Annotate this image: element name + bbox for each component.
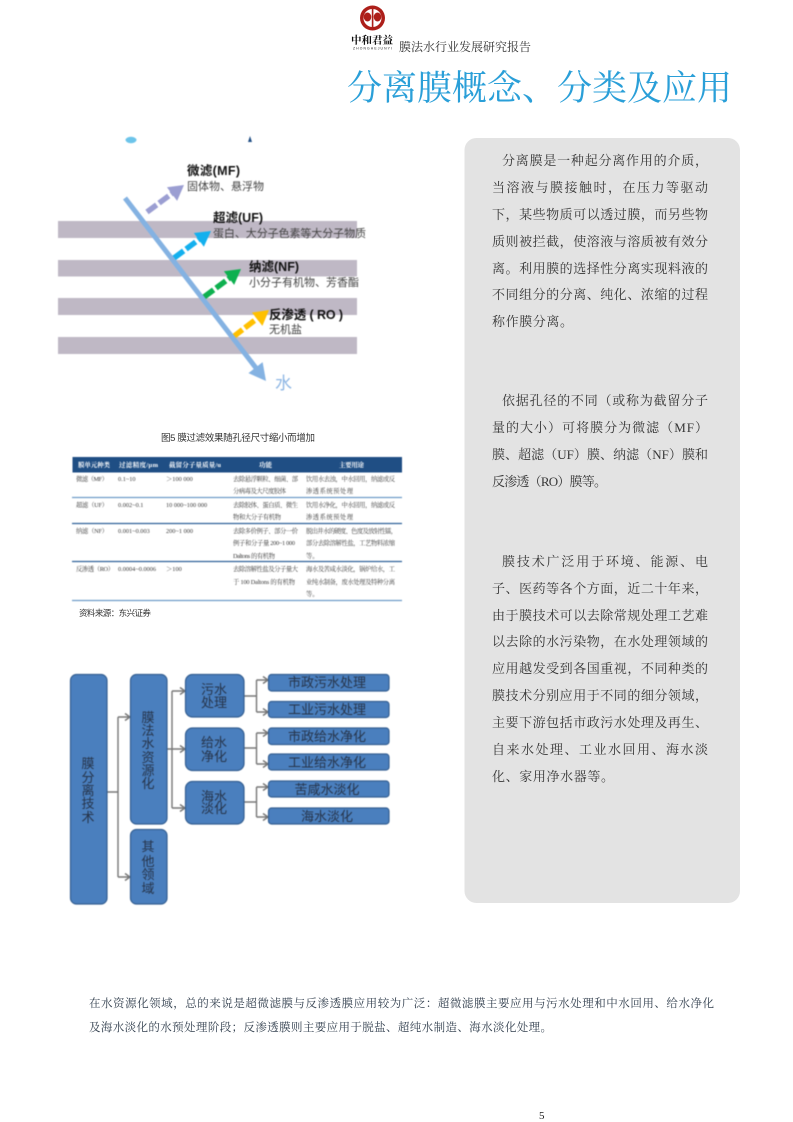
paragraph: definition: 下，某些物质可以透过膜，而另些物 xyxy=(492,207,708,223)
row: NF: 等。 xyxy=(306,551,319,560)
label: RO: 无机盐 xyxy=(269,322,302,336)
label: NF xyxy=(249,259,359,289)
header logo xyxy=(351,6,394,50)
node: 膜法水资源化: 源 xyxy=(141,763,155,778)
node: 膜分离技术: 离 xyxy=(81,783,95,798)
row: UF: 物和大分子有机物 xyxy=(233,512,282,521)
paragraph: applications: 主要下游包括市政污水处理及再生、 xyxy=(492,715,708,730)
panel: membrane description xyxy=(464,138,740,903)
node: 其他领域: 其 xyxy=(141,839,155,854)
row: NF: Daltons 的有机物 xyxy=(233,551,276,560)
label: MF: 微滤(MF) xyxy=(187,163,240,178)
label: UF: 超滤(UF) xyxy=(213,210,263,225)
flow chart: membrane separation technology xyxy=(70,674,389,904)
paragraph: classification xyxy=(492,393,708,489)
row: UF: 10 000~100 000 xyxy=(166,502,207,509)
row: NF: 脱出井水的硬度、色度及放射性镭， xyxy=(306,526,397,535)
node: 其他领域: 领 xyxy=(141,867,155,882)
node: 工业给水净化: 工业给水净化 xyxy=(288,755,366,770)
row: MF: 去除悬浮颗粒、细菌、部 xyxy=(233,474,299,483)
table header: 过滤精度/μm xyxy=(119,460,159,469)
node: 工业污水处理: 工业污水处理 xyxy=(288,702,366,717)
node: 污水处理: 污水 xyxy=(201,682,227,697)
header logo: 中和君益 xyxy=(351,34,394,46)
arrow: NF xyxy=(204,262,246,297)
paragraph: applications: 膜技术广泛用于环境、能源、电 xyxy=(502,554,708,569)
node: 膜分离技术: 分 xyxy=(81,770,95,785)
paragraph: definition xyxy=(492,153,708,329)
label: NF: 纳滤(NF) xyxy=(249,259,299,274)
label: RO xyxy=(269,307,343,336)
table header: 主要用途 xyxy=(339,460,364,469)
row: UF: 去除胶体、蛋白质、微生 xyxy=(233,500,299,509)
row: UF: 饮用水净化，中水回用，纳滤或反 xyxy=(306,500,396,509)
row: RO: 等。 xyxy=(306,589,319,598)
paragraph: applications: 由于膜技术可以去除常规处理工艺难 xyxy=(492,608,708,623)
paragraph: definition: 不同组分的分离、纯化、浓缩的过程 xyxy=(492,287,708,302)
node: 海水淡化 (leaf) xyxy=(268,808,389,824)
paragraph: definition: 质则被拦截，使溶液与溶质被有效分 xyxy=(492,234,708,250)
row: UF: 0.002~0.1 xyxy=(118,502,143,509)
bottom text block xyxy=(89,996,714,1034)
bottom text block: 在水资源化领域，总的来说是超微滤膜与反渗透膜应用较为广泛：超微滤膜主要应用与污水处理和中水回用、给水净化 xyxy=(89,996,714,1010)
node: 给水净化 xyxy=(186,728,244,770)
node: 工业污水处理 xyxy=(268,702,389,718)
row: RO: 0.0004~0.0006 xyxy=(118,566,156,573)
table source: 资料来源：东兴证券 xyxy=(79,608,151,618)
node: 膜分离技术 xyxy=(70,674,107,904)
row: UF: 超滤（UF） xyxy=(76,500,108,509)
node: 膜法水资源化: 化 xyxy=(141,776,155,791)
node: 市政污水处理: 市政污水处理 xyxy=(288,675,366,690)
bottom text block: 及海水淡化的水预处理阶段；反渗透膜则主要应用于脱盐、超纯水制造、海水淡化处理。 xyxy=(89,1020,552,1034)
node: 苦咸水淡化 xyxy=(268,781,389,797)
paragraph: applications: 自来水处理、工业水回用、海水淡 xyxy=(492,742,708,757)
node: 其他领域: 他 xyxy=(141,854,155,869)
row: MF: 微滤（MF） xyxy=(76,474,108,483)
label: MF xyxy=(187,163,264,193)
paragraph: classification: 反渗透（RO）膜等。 xyxy=(492,474,607,489)
connectors xyxy=(107,676,268,880)
table caption: 图5 膜过滤效果随孔径尺寸缩小而增加 xyxy=(161,432,315,444)
table: membrane types xyxy=(72,457,402,600)
row: NF: 200~1 000 xyxy=(166,528,193,535)
row: NF: 例子和分子量 200~1 000 xyxy=(233,538,295,547)
header report name: 膜法水行业发展研究报告 xyxy=(399,39,531,54)
table header: 膜单元种类 xyxy=(78,460,110,469)
arrow: MF xyxy=(147,178,189,212)
node: 膜分离技术: 膜 xyxy=(81,756,95,771)
row: MF: 分病毒及大尺度胶体 xyxy=(233,486,287,495)
node: 其他领域 xyxy=(130,830,167,904)
node: 膜法水资源化: 法 xyxy=(141,723,155,738)
chart: membrane filtration diagram xyxy=(58,136,366,393)
node: 海水淡化: 淡化 xyxy=(201,801,227,816)
row: MF: 0.1~10 xyxy=(118,476,136,483)
arrow: water xyxy=(125,198,273,387)
header logo: ZHONGHEJUNYI xyxy=(353,46,392,50)
row: MF: 渗透系统预处理 xyxy=(306,486,354,495)
paragraph: definition: 离。利用膜的选择性分离实现料液的 xyxy=(492,261,708,276)
paragraph: applications: 以去除的水污染物，在水处理领域的 xyxy=(492,634,708,650)
row: MF xyxy=(76,474,396,495)
row: NF: 纳滤（NF） xyxy=(76,526,108,535)
table header: 功能 xyxy=(259,460,272,469)
node: 污水处理 xyxy=(186,674,244,717)
node: 给水净化: 净化 xyxy=(201,749,227,764)
table header xyxy=(72,457,402,472)
node: 市政污水处理 xyxy=(268,674,389,691)
node: 污水处理: 处理 xyxy=(201,695,227,710)
row: RO: 反渗透（RO） xyxy=(76,564,114,573)
node: 海水淡化 (leaf): 海水淡化 xyxy=(301,809,353,824)
row: NF: 部分去除溶解性盐，工艺物料浓缩 xyxy=(306,538,396,547)
node: 膜法水资源化: 膜 xyxy=(141,710,155,725)
title: 分离膜概念、分类及应用 xyxy=(347,69,732,108)
paragraph: classification: 量的大小）可将膜分为微滤（MF） xyxy=(492,420,708,435)
paragraph: classification: 依据孔径的不同（或称为截留分子 xyxy=(502,393,708,408)
paragraph: applications: 化、家用净水器等。 xyxy=(492,769,614,784)
node: 膜分离技术: 术 xyxy=(81,810,95,825)
row: RO: 海水及苦咸水淡化，锅炉给水，工 xyxy=(306,564,396,573)
row: NF: 0.001~0.003 xyxy=(118,528,150,535)
node: 苦咸水淡化: 苦咸水淡化 xyxy=(294,782,360,797)
node: 膜法水资源化 xyxy=(130,674,167,824)
label: UF: 蛋白、大分子色素等大分子物质 xyxy=(213,226,366,240)
row: RO: ＞100 xyxy=(166,566,182,573)
node: 膜分离技术: 技 xyxy=(81,796,95,811)
node: 市政给水净化 xyxy=(268,728,389,744)
row: UF: 渗透系统预处理 xyxy=(306,512,354,521)
row: UF xyxy=(76,500,396,521)
node: 工业给水净化 xyxy=(268,754,389,770)
paragraph: classification: 膜、超滤（UF）膜、纳滤（NF）膜和 xyxy=(492,447,708,462)
node: 膜法水资源化: 资 xyxy=(141,750,155,765)
table header: 截留分子量质量/u xyxy=(169,460,221,469)
row: RO: 去除溶解性盐及分子量大 xyxy=(233,564,299,573)
label: MF: 固体物、悬浮物 xyxy=(187,179,264,193)
row: RO: 于 100 Daltons 的有机物 xyxy=(233,577,296,586)
row: RO xyxy=(76,564,396,598)
paragraph: applications: 子、医药等各个方面，近二十年来， xyxy=(492,581,708,597)
node: 膜法水资源化: 水 xyxy=(141,736,155,751)
row: MF: 饮用水去浊，中水回用，纳滤或反 xyxy=(306,474,396,483)
label: UF xyxy=(213,210,366,240)
node: 市政给水净化: 市政给水净化 xyxy=(288,729,366,744)
paragraph: definition: 分离膜是一种起分离作用的介质， xyxy=(502,153,708,169)
label: NF: 小分子有机物、芳香酯 xyxy=(249,275,359,289)
page number: 5 xyxy=(539,1110,545,1122)
paragraph: applications: 膜技术分别应用于不同的细分领域， xyxy=(492,688,708,704)
paragraph: definition: 当溶液与膜接触时，在压力等驱动 xyxy=(492,180,708,196)
row: RO: 业纯水制备，废水处理及特种分离 xyxy=(306,577,395,586)
arrow: UF xyxy=(174,224,216,258)
node: 海水淡化 xyxy=(186,782,244,824)
paragraph: applications: 应用越发受到各国重视，不同种类的 xyxy=(492,661,708,677)
row: NF xyxy=(76,526,397,560)
node: 海水淡化: 海水 xyxy=(201,789,227,804)
label: RO: 反渗透 ( RO ) xyxy=(269,307,343,322)
row: NF: 去除多价例子、部分一价 xyxy=(233,526,299,535)
row: MF: ＞100 000 xyxy=(166,476,193,483)
arrow: RO xyxy=(233,303,274,337)
node: 给水净化: 给水 xyxy=(201,735,227,750)
paragraph: applications xyxy=(492,554,708,784)
node: 其他领域: 域 xyxy=(141,881,155,896)
paragraph: definition: 称作膜分离。 xyxy=(492,314,573,329)
label: water: 水 xyxy=(275,374,292,393)
